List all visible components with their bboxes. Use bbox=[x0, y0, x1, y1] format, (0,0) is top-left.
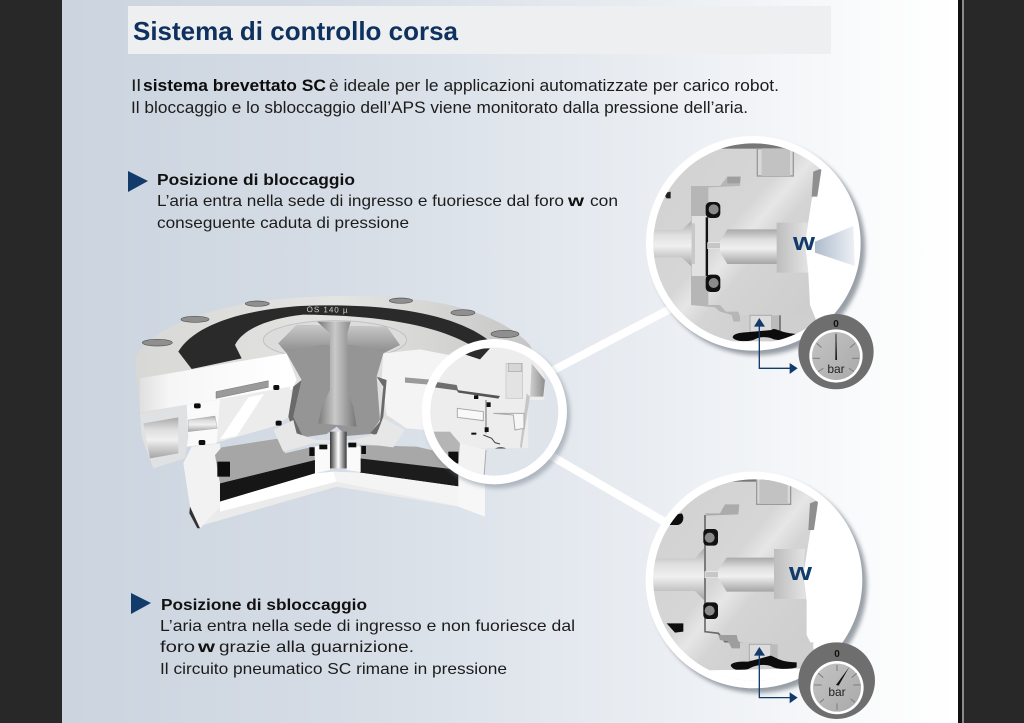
detail circle: locked bbox=[640, 136, 874, 389]
text: locked position: Posizione di bloccaggio bbox=[157, 172, 355, 189]
upper left slab bbox=[140, 353, 297, 413]
dark band end bbox=[465, 348, 490, 360]
bores bbox=[457, 408, 483, 421]
left bore bbox=[650, 221, 692, 267]
O-rings bbox=[703, 529, 718, 546]
marker: locked position bbox=[128, 171, 148, 192]
text: unlocked position: grazie alla guarnizione. bbox=[219, 639, 414, 656]
right wall bbox=[458, 433, 485, 517]
gauge bar label: bar bbox=[828, 685, 846, 699]
text: unlocked position: L’aria entra nella sede di ingresso e non fuoriesce dal bbox=[160, 618, 575, 635]
lower left shapes bbox=[458, 448, 486, 474]
black seal bbox=[495, 447, 506, 448]
title: Sistema di controllo corsa bbox=[133, 16, 459, 46]
w port label: locked: w bbox=[792, 229, 815, 256]
shine bbox=[220, 394, 264, 439]
O-rings bbox=[706, 202, 720, 218]
intro text bbox=[131, 76, 779, 117]
right bore bbox=[720, 229, 777, 264]
text: locked position: conseguente caduta di pressione bbox=[157, 215, 409, 232]
left lower cavity bbox=[215, 438, 315, 483]
centre recess bbox=[263, 321, 407, 359]
central cup bbox=[278, 325, 400, 437]
black seal bbox=[731, 656, 797, 670]
pressure arrow bbox=[754, 318, 798, 374]
gauge zero label: 0 bbox=[834, 649, 840, 660]
slot bbox=[216, 381, 268, 398]
product lettering: OS 140 µ bbox=[307, 305, 349, 315]
right slab bbox=[382, 349, 467, 433]
w port label: unlocked: w bbox=[788, 559, 812, 586]
right lower cavity bbox=[360, 445, 460, 470]
bottom skirt bbox=[200, 472, 485, 528]
counterbore bbox=[777, 223, 808, 273]
flange behind bbox=[430, 348, 544, 448]
top fitting bbox=[757, 478, 791, 504]
black seal bbox=[733, 329, 800, 341]
needle bbox=[836, 667, 849, 686]
left bore bbox=[650, 548, 704, 600]
intro text: Il bbox=[131, 76, 141, 95]
needle bbox=[835, 334, 837, 360]
text: locked position: L’aria entra nella sede di ingresso e fuoriesce dal foro bbox=[157, 193, 564, 210]
central post bbox=[315, 444, 330, 473]
text: unlocked position: Il circuito pneumatico SC rimane in pressione bbox=[160, 661, 507, 678]
central shaft bbox=[317, 322, 357, 427]
thin gap bbox=[705, 515, 738, 642]
gauge zero label: 0 bbox=[833, 319, 839, 330]
gauge bar label: bar bbox=[827, 362, 845, 376]
housing bbox=[647, 140, 822, 343]
top fitting bbox=[757, 149, 793, 176]
magnifier shadow bbox=[425, 343, 570, 488]
channel bbox=[708, 243, 721, 249]
lower left wall bbox=[183, 443, 220, 528]
shadow bbox=[650, 476, 867, 693]
slot bbox=[435, 382, 458, 390]
housing bbox=[647, 475, 818, 685]
title bar bbox=[128, 6, 831, 54]
text: unlocked position: foro bbox=[160, 639, 195, 656]
left piston cavity bbox=[691, 176, 740, 322]
gauge bbox=[798, 642, 875, 719]
small magnifier bbox=[422, 339, 572, 490]
cutaway device bbox=[135, 296, 545, 528]
small seals bbox=[471, 395, 491, 435]
black gasket line bbox=[706, 217, 708, 276]
intro text: è ideale per le applicazioni automatizzate per carico robot. bbox=[329, 76, 779, 95]
right bore bbox=[718, 558, 774, 592]
black logo band bbox=[178, 305, 488, 369]
mid left band bbox=[187, 387, 295, 447]
intro text: sistema brevettato SC bbox=[143, 76, 326, 95]
air jet bbox=[815, 226, 855, 266]
text: unlocked position bbox=[160, 597, 575, 678]
text: locked position: con bbox=[590, 193, 618, 210]
gauge bbox=[798, 314, 874, 389]
lower pocket bbox=[740, 642, 814, 648]
text: unlocked position: w bbox=[197, 639, 216, 656]
text: locked position: w bbox=[567, 193, 585, 210]
cup lower body bbox=[273, 418, 405, 452]
black slots left bbox=[668, 513, 683, 525]
text: unlocked position: Posizione di sbloccaggio bbox=[161, 597, 367, 614]
stepped line bbox=[483, 435, 500, 444]
counterbore bbox=[774, 549, 806, 599]
text: locked position bbox=[157, 172, 618, 232]
channel bbox=[705, 572, 718, 578]
intro text: Il bloccaggio e lo sbloccaggio dell’APS viene monitorato dalla pressione dell’aria. bbox=[131, 98, 748, 117]
seals bbox=[194, 382, 400, 445]
left bore bbox=[140, 405, 188, 468]
shadow bbox=[651, 141, 865, 355]
marker: unlocked position bbox=[131, 593, 151, 614]
bolts on flange bbox=[142, 298, 519, 346]
bolt detail bbox=[506, 363, 523, 398]
lower pocket bbox=[740, 316, 806, 334]
detail circle: unlocked bbox=[640, 472, 875, 719]
slot right bbox=[405, 377, 453, 387]
flange top surface bbox=[135, 296, 545, 423]
connector lines bbox=[548, 308, 672, 525]
pressure arrow bbox=[754, 647, 798, 703]
